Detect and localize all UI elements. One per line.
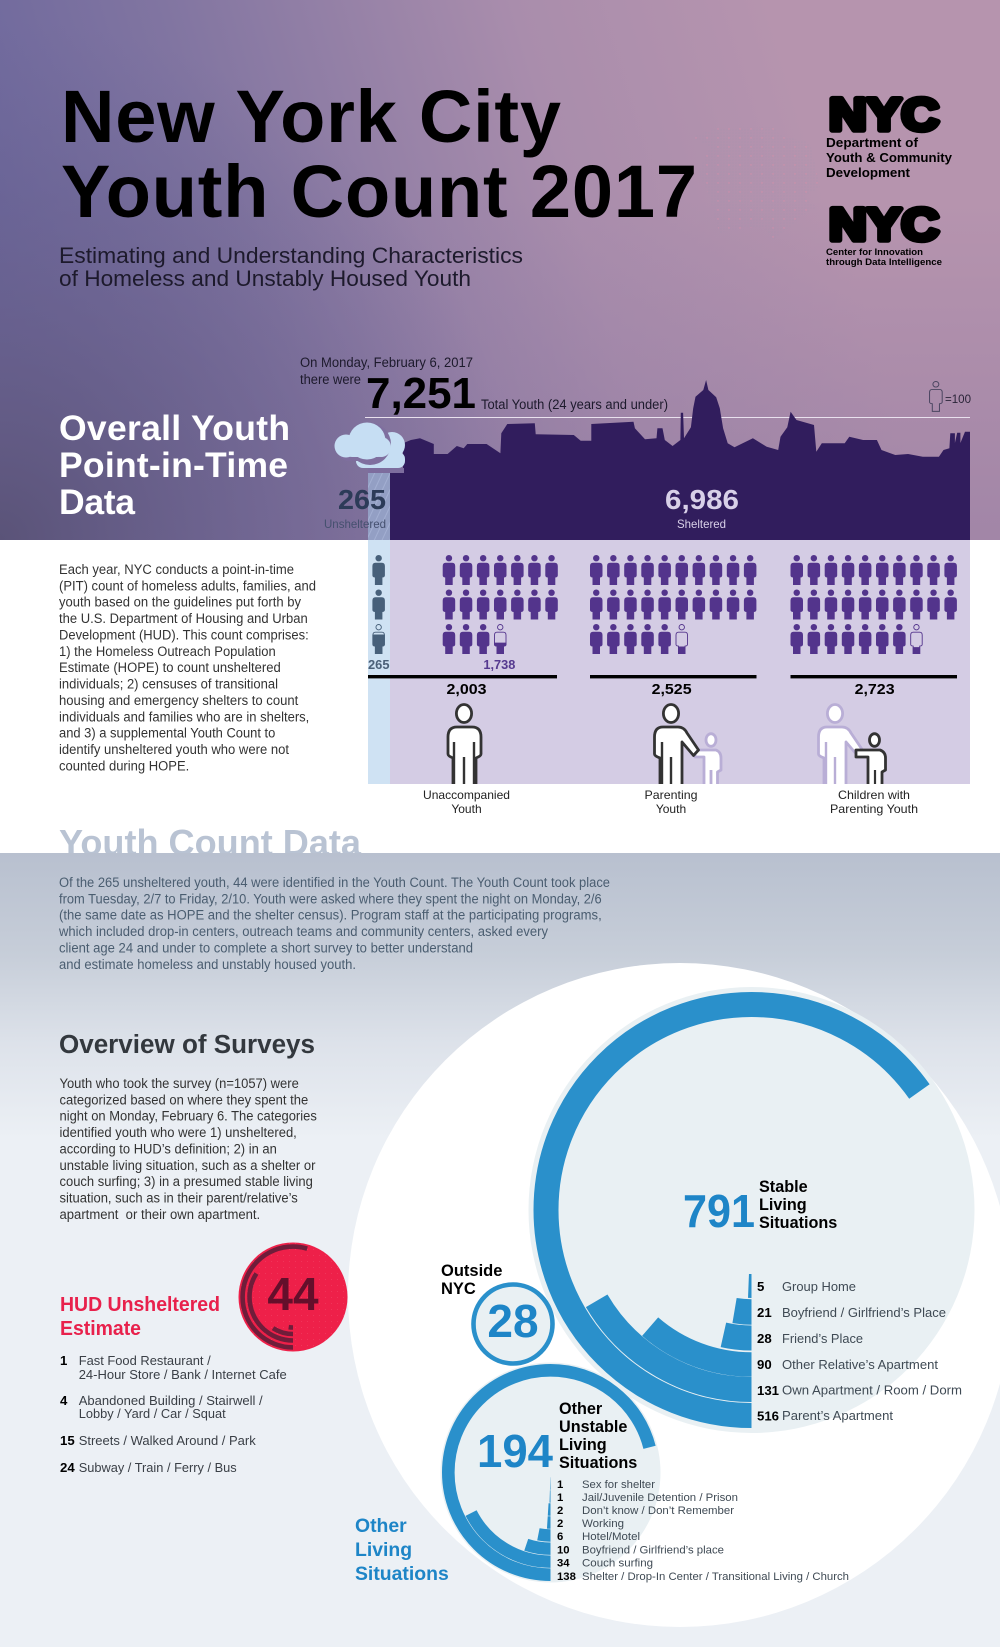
paragraph: overview: situation, such as in their parent/relative’s bbox=[60, 1191, 298, 1206]
total youth intro text: On Monday, February 6, 2017 bbox=[300, 355, 473, 370]
heading: Overall Youth Point-in-Time Data: Data bbox=[59, 482, 135, 522]
logo: NYC Department of Youth & Community Development: Department of bbox=[826, 135, 919, 150]
column labels: Unaccompanied bbox=[423, 788, 510, 802]
paragraph: overview: according to HUD’s definition; 2) in an bbox=[60, 1142, 277, 1156]
intro paragraph: individuals; 2) censuses of transitional bbox=[59, 677, 278, 692]
stat: 28 outside NYC: 28 bbox=[487, 1295, 539, 1347]
list: other unstable categories: 138 bbox=[557, 1571, 576, 1583]
logo: NYC Center for Innovation through Data Intelligence bbox=[826, 199, 942, 268]
intro paragraph: and 3) a supplemental Youth Count to bbox=[59, 726, 275, 741]
grey lower section background bbox=[0, 853, 1000, 1647]
list: stable living categories: Other Relative’s Apartment bbox=[782, 1357, 938, 1372]
intro paragraph: 1) the Homeless Outreach Population bbox=[59, 644, 276, 659]
heading: Other Living Situations: Other bbox=[355, 1515, 407, 1537]
list: other unstable categories: Jail/Juvenile Detention / Prison bbox=[582, 1492, 738, 1504]
list: stable living categories: 516 bbox=[757, 1408, 779, 1424]
heading: Overall Youth Point-in-Time Data bbox=[59, 408, 290, 522]
list: stable living categories bbox=[757, 1279, 962, 1424]
stat: 194 other unstable living situations: 194 bbox=[477, 1425, 553, 1477]
total bars bbox=[368, 675, 957, 678]
list: other unstable categories: Shelter / Drop-In Center / Transitional Living / Church bbox=[582, 1571, 849, 1583]
legend: one person equals 100 bbox=[930, 382, 971, 411]
paragraph: Youth Count description: Of the 265 unsheltered youth, 44 were identified in the Youth Count. The Youth Count took place bbox=[59, 875, 610, 890]
subtitle bbox=[59, 243, 523, 291]
list: HUD unsheltered locations: 24 bbox=[60, 1460, 75, 1475]
paragraph: Youth Count description bbox=[58, 875, 610, 972]
intro paragraph: youth based on the guidelines put forth by bbox=[59, 595, 301, 610]
list: stable living categories: Friend’s Place bbox=[782, 1331, 863, 1346]
stat: 194 other unstable living situations: Other bbox=[559, 1400, 603, 1418]
stat: 194 other unstable living situations: Situations bbox=[559, 1454, 637, 1472]
total youth intro text bbox=[300, 355, 668, 418]
logo: NYC Center for Innovation through Data Intelligence: through Data Intelligence bbox=[826, 257, 942, 268]
chart: other unstable living situations radial bbox=[440, 1362, 660, 1582]
stat: 194 other unstable living situations bbox=[477, 1400, 637, 1477]
stat: 265 unsheltered bbox=[324, 484, 386, 531]
page background: header gradient band bbox=[0, 0, 1000, 540]
list: other unstable categories: 34 bbox=[557, 1558, 570, 1570]
chart: red radial 44: 44 bbox=[267, 1268, 319, 1320]
list: other unstable categories: 2 bbox=[557, 1518, 563, 1530]
heading: Outside NYC bbox=[441, 1262, 502, 1298]
title: New York City bbox=[61, 75, 561, 158]
breakdown values 265 and 1,738: 1,738 bbox=[483, 657, 515, 672]
totals bbox=[446, 681, 895, 698]
intro paragraph: (PIT) count of homeless adults, families, and bbox=[59, 578, 316, 593]
list: HUD unsheltered locations: Subway / Train / Ferry / Bus bbox=[79, 1460, 237, 1475]
heading: Overview of Surveys: Overview of Surveys bbox=[59, 1031, 315, 1059]
subtitle: of Homeless and Unstably Housed Youth bbox=[59, 266, 471, 291]
list: other unstable categories: 2 bbox=[557, 1505, 563, 1517]
list: stable living categories: Parent’s Apartment bbox=[782, 1408, 893, 1423]
pictogram: parenting youth bbox=[590, 555, 756, 654]
column labels: Parenting Youth bbox=[830, 802, 918, 816]
icon: unaccompanied youth figure bbox=[448, 704, 481, 790]
title bbox=[61, 75, 697, 233]
title: Youth Count 2017 bbox=[61, 150, 697, 233]
paragraph: Youth Count description: client age 24 and under to complete a short survey to better understand bbox=[59, 940, 473, 956]
total youth intro text: 7,251 bbox=[366, 370, 476, 418]
intro paragraph: individuals and families who are in shelters, bbox=[59, 709, 309, 724]
list: HUD unsheltered locations: Abandoned Building / Stairwell / bbox=[79, 1393, 263, 1408]
list: other unstable categories: 10 bbox=[557, 1544, 570, 1556]
legend: one person equals 100: =100 bbox=[945, 394, 971, 406]
list: other unstable categories bbox=[557, 1479, 849, 1583]
totals: 2,003 bbox=[446, 681, 486, 698]
icon: cloud bbox=[334, 422, 405, 473]
list: stable living categories: Own Apartment / Room / Dorm bbox=[782, 1382, 962, 1398]
paragraph: overview: categorized based on where they spent the bbox=[60, 1092, 308, 1107]
column labels: Children with bbox=[838, 788, 910, 802]
intro paragraph: counted during HOPE. bbox=[59, 758, 189, 773]
pictogram: children with parenting youth bbox=[790, 555, 957, 654]
paragraph: Youth Count description: which included drop-in centers, outreach teams and community centers, asked every bbox=[58, 924, 548, 939]
intro paragraph: identify unsheltered youth who were not bbox=[59, 742, 289, 757]
paragraph: Youth Count description: and estimate homeless and unstably housed youth. bbox=[59, 957, 356, 972]
breakdown values 265 and 1,738 bbox=[368, 657, 515, 672]
totals: 2,723 bbox=[855, 681, 895, 698]
pictogram: unaccompanied youth bbox=[443, 555, 558, 654]
paragraph: overview bbox=[60, 1076, 317, 1222]
logo: NYC Department of Youth & Community Development: Youth & Community bbox=[826, 150, 953, 165]
total youth intro text: there were bbox=[300, 372, 361, 387]
list: HUD unsheltered locations: 1 bbox=[60, 1353, 67, 1368]
icon: parenting youth figure with child bbox=[654, 704, 721, 790]
list: other unstable categories: 1 bbox=[557, 1479, 563, 1491]
stat: 791 stable living situations: 791 bbox=[683, 1185, 755, 1237]
logo: NYC Department of Youth & Community Development: Development bbox=[826, 165, 911, 180]
heading: HUD Unsheltered Estimate: Estimate bbox=[60, 1317, 141, 1340]
stat: 265 unsheltered: Unsheltered bbox=[324, 517, 386, 531]
skyline: sheltered bbox=[390, 380, 970, 540]
heading: Overall Youth Point-in-Time Data: Point-in-Time bbox=[59, 445, 288, 485]
list: HUD unsheltered locations: Fast Food Restaurant / bbox=[79, 1353, 211, 1368]
list: HUD unsheltered locations: 24-Hour Store / Bank / Internet Cafe bbox=[79, 1367, 287, 1382]
paragraph: overview: Youth who took the survey (n=1057) were bbox=[60, 1076, 299, 1091]
pictogram: unsheltered column bbox=[372, 555, 385, 654]
list: stable living categories: Group Home bbox=[782, 1279, 856, 1294]
list: other unstable categories: Sex for shelter bbox=[582, 1479, 655, 1491]
list: HUD unsheltered locations: Lobby / Yard / Car / Squat bbox=[79, 1406, 226, 1421]
list: stable living categories: 28 bbox=[757, 1331, 772, 1346]
paragraph: Youth Count description: (the same date as HOPE and the shelter census). Program staff at the participating programs, bbox=[59, 908, 602, 923]
list: stable living categories: 131 bbox=[757, 1383, 779, 1398]
totals: 2,525 bbox=[652, 681, 692, 698]
list: stable living categories: 90 bbox=[757, 1357, 772, 1372]
logo: NYC Center for Innovation through Data Intelligence: NYC bbox=[829, 199, 939, 250]
white section background bbox=[0, 540, 1000, 853]
logo: NYC Center for Innovation through Data Intelligence: Center for Innovation bbox=[826, 247, 923, 258]
heading: HUD Unsheltered Estimate: HUD Unsheltered bbox=[60, 1293, 220, 1316]
heading: Other Living Situations bbox=[355, 1515, 449, 1585]
stat: 265 unsheltered: 265 bbox=[338, 484, 386, 515]
heading: HUD Unsheltered Estimate bbox=[60, 1293, 220, 1340]
chart: red radial 44 bbox=[238, 1242, 348, 1352]
paragraph: overview: unstable living situation, such as a shelter or bbox=[60, 1158, 316, 1173]
stat: 791 stable living situations bbox=[683, 1178, 837, 1237]
stat: 194 other unstable living situations: Unstable bbox=[559, 1418, 627, 1436]
heading: Other Living Situations: Situations bbox=[355, 1563, 449, 1585]
paragraph: overview: apartment or their own apartment. bbox=[60, 1207, 260, 1222]
baseline rule above skyline bbox=[365, 417, 970, 418]
list: other unstable categories: Hotel/Motel bbox=[582, 1531, 640, 1543]
subtitle: Estimating and Understanding Characteristics bbox=[59, 243, 523, 268]
stat: 791 stable living situations: Stable bbox=[759, 1178, 808, 1196]
list: other unstable categories: 1 bbox=[557, 1492, 563, 1504]
list: HUD unsheltered locations bbox=[60, 1353, 287, 1475]
list: other unstable categories: Don’t know / Don’t Remember bbox=[582, 1505, 734, 1517]
stippled graduation cap map bbox=[693, 127, 820, 240]
heading: Youth Count Data: Youth Count Data bbox=[59, 822, 362, 863]
stat: 791 stable living situations: Situations bbox=[759, 1214, 837, 1232]
list: other unstable categories: Couch surfing bbox=[582, 1558, 653, 1570]
heading: Other Living Situations: Living bbox=[355, 1539, 412, 1561]
heading: Outside NYC: NYC bbox=[441, 1280, 476, 1298]
intro paragraph: Each year, NYC conducts a point-in-time bbox=[59, 562, 294, 577]
column labels bbox=[423, 788, 918, 816]
list: other unstable categories: Working bbox=[582, 1518, 624, 1530]
logo: NYC Department of Youth & Community Development bbox=[826, 89, 953, 180]
breakdown values 265 and 1,738: 265 bbox=[368, 657, 390, 672]
hatched unsheltered column bbox=[368, 472, 390, 540]
stat: 791 stable living situations: Living bbox=[759, 1196, 807, 1214]
intro paragraph: the U.S. Department of Housing and Urban bbox=[59, 611, 308, 626]
stat: 194 other unstable living situations: Living bbox=[559, 1436, 607, 1454]
heading: Overall Youth Point-in-Time Data: Overall Youth bbox=[59, 408, 290, 448]
chart: stable living situations radial bbox=[528, 987, 974, 1433]
paragraph: overview: couch surfing; 3) in a presumed stable living bbox=[60, 1174, 313, 1189]
list: stable living categories: 5 bbox=[757, 1279, 764, 1294]
total youth intro text: Total Youth (24 years and under) bbox=[481, 397, 668, 412]
intro paragraph: housing and emergency shelters to count bbox=[59, 693, 299, 708]
intro paragraph: Estimate (HOPE) to count unsheltered bbox=[59, 660, 281, 675]
list: stable living categories: Boyfriend / Girlfriend’s Place bbox=[782, 1305, 946, 1320]
logo: NYC Department of Youth & Community Development: NYC bbox=[829, 89, 939, 140]
stat: 6,986 sheltered bbox=[665, 484, 739, 531]
icon: child with parenting youth figure bbox=[818, 704, 886, 790]
list: HUD unsheltered locations: 4 bbox=[60, 1393, 68, 1408]
column labels: Parenting bbox=[644, 788, 698, 802]
list: other unstable categories: Boyfriend / Girlfriend’s place bbox=[582, 1544, 724, 1556]
heading: Outside NYC: Outside bbox=[441, 1262, 502, 1280]
white backdrop circle bbox=[348, 963, 1000, 1627]
list: stable living categories: 21 bbox=[757, 1305, 772, 1320]
column labels: Youth bbox=[451, 802, 482, 816]
intro paragraph: Development (HUD). This count comprises: bbox=[59, 628, 309, 642]
paragraph: overview: identified youth who were 1) unsheltered, bbox=[60, 1125, 297, 1140]
paragraph: Youth Count description: from Tuesday, 2/7 to Friday, 2/10. Youth were asked where they spent the night on Monday, 2/6 bbox=[59, 891, 602, 906]
paragraph: overview: night on Monday, February 6. The categories bbox=[60, 1109, 317, 1124]
list: HUD unsheltered locations: 15 bbox=[60, 1433, 75, 1448]
stat: 6,986 sheltered: 6,986 bbox=[665, 484, 739, 515]
panel: household type background bbox=[368, 540, 970, 784]
stat: 6,986 sheltered: Sheltered bbox=[677, 517, 726, 531]
intro paragraph bbox=[59, 562, 316, 773]
column labels: Youth bbox=[656, 802, 686, 816]
list: other unstable categories: 6 bbox=[557, 1531, 563, 1543]
stat: 28 outside NYC bbox=[474, 1284, 552, 1364]
list: HUD unsheltered locations: Streets / Walked Around / Park bbox=[79, 1433, 256, 1448]
